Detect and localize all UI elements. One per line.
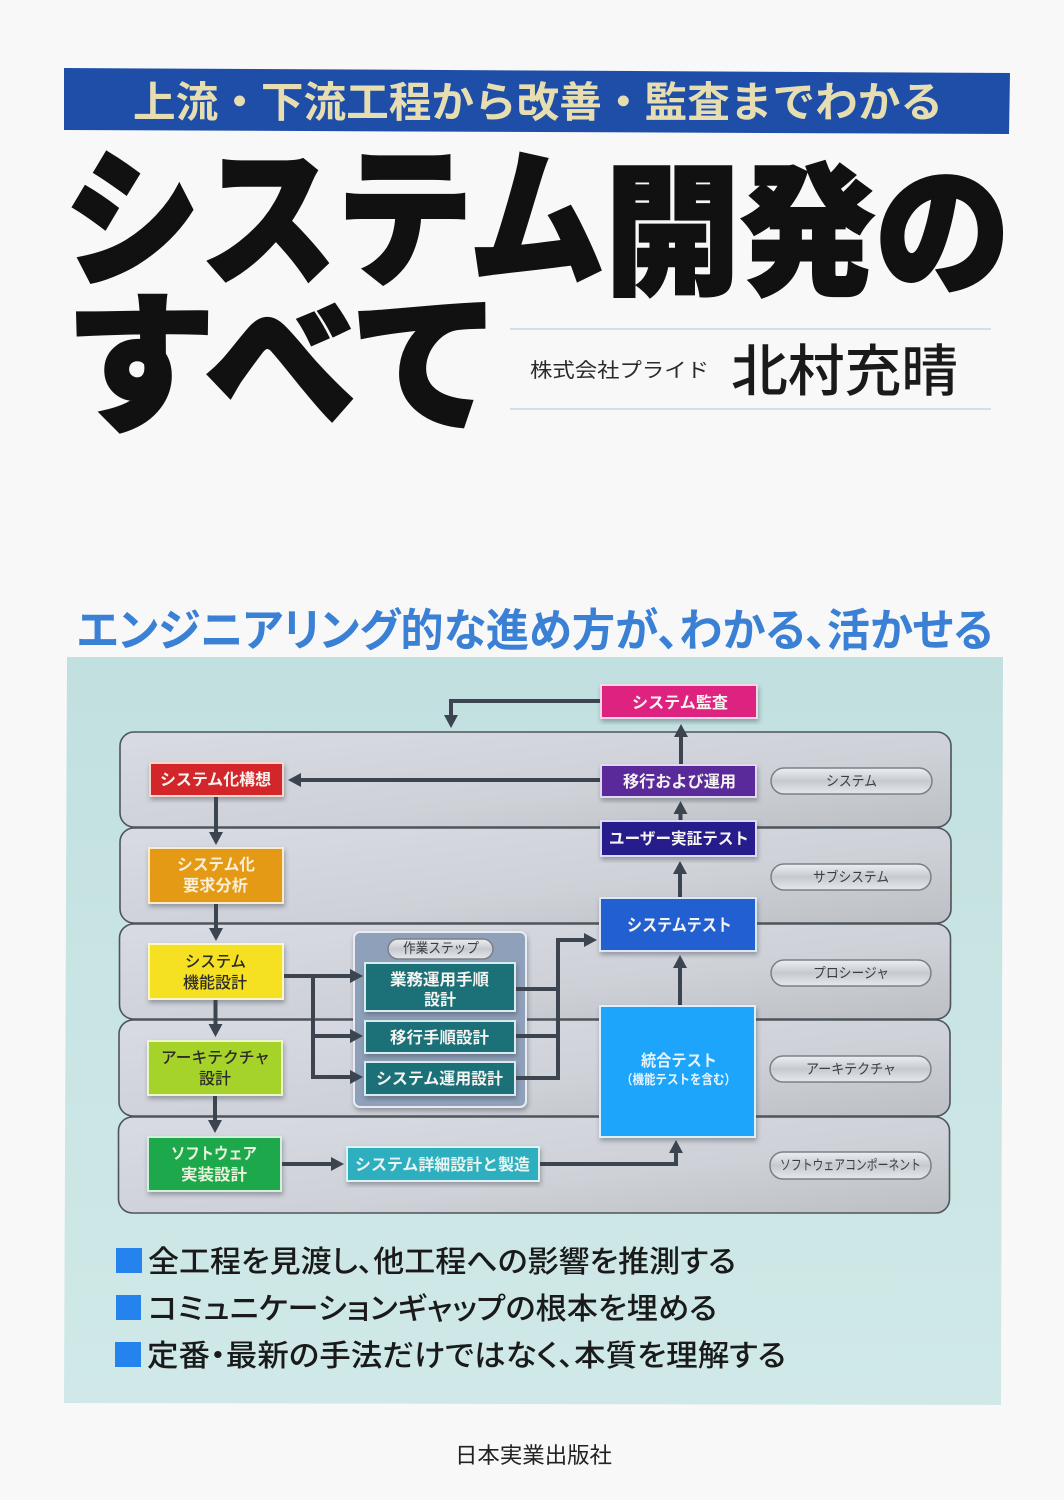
box: functional design: システム: [185, 954, 246, 971]
author block: 株式会社プライド: [530, 359, 709, 382]
box: architecture design: [148, 1041, 282, 1095]
box: user acceptance test: ユーザー実証テスト: [609, 830, 749, 848]
bullet 3: 定番・最新の手法だけではなく、本質を理解する: [147, 1340, 786, 1373]
box: software implementation design: [148, 1137, 281, 1191]
box: system audit: システム監査: [632, 694, 728, 712]
box: system operation design: システム運用設計: [376, 1070, 503, 1088]
box: system concept: システム化構想: [160, 770, 271, 789]
box: integration test: [600, 1006, 755, 1137]
box: detail design and manufacture: [347, 1147, 539, 1181]
author block: [510, 329, 991, 409]
pill: subsystem: サブシステム: [813, 869, 889, 885]
pill: software component: ソフトウェアコンポーネント: [780, 1157, 921, 1173]
box: software implementation design: 実装設計: [181, 1166, 247, 1184]
main title: システム: [64, 137, 605, 305]
layer band: procedure: [120, 924, 950, 1019]
box: business procedure design: 設計: [424, 991, 456, 1009]
pill: software component: [770, 1152, 931, 1179]
blue tagline banner: 上流・下流工程から改善・監査までわかる: [133, 79, 943, 126]
box: business procedure design: 業務運用手順: [390, 970, 489, 989]
box: user acceptance test: [601, 821, 756, 856]
box: business procedure design: [365, 963, 515, 1011]
box: architecture design: 設計: [199, 1070, 231, 1088]
layer band: system: [120, 732, 951, 827]
main title: [64, 137, 1010, 452]
author block: 北村充晴: [731, 340, 958, 403]
box: migration procedure design: 移行手順設計: [390, 1028, 489, 1047]
box: detail design and manufacture: システム詳細設計と製造: [355, 1155, 530, 1174]
box: system audit: [601, 685, 757, 718]
box: requirements analysis: 要求分析: [183, 876, 248, 895]
publisher: 日本実業出版社: [455, 1443, 612, 1468]
layer band: subsystem: [120, 828, 951, 923]
bullet 1: 全工程を見渡し、他工程への影響を推測する: [148, 1246, 736, 1279]
box: software implementation design: ソフトウェア: [171, 1145, 257, 1163]
box: requirements analysis: システム化: [177, 856, 255, 874]
pill: procedure: [771, 960, 931, 986]
layer band: architecture: [119, 1020, 950, 1116]
box: system operation design: [365, 1062, 515, 1095]
pill: system: [771, 768, 932, 794]
box: migration and operation: [601, 765, 756, 797]
box: requirements analysis: [149, 848, 283, 903]
main title: すべて: [65, 282, 501, 452]
box: system concept: [150, 763, 283, 796]
box: integration test: 統合テスト: [641, 1052, 717, 1070]
panel: work steps: [354, 932, 526, 1107]
connector arrows: [208, 701, 688, 1171]
box: system test: [600, 898, 756, 951]
blue tagline banner: [64, 68, 1010, 134]
box: integration test: （機能テストを含む）: [621, 1072, 736, 1087]
pill: work steps: [388, 939, 493, 959]
blue subheading: エンジニアリング的な進め方が、わかる、活かせる: [77, 605, 993, 656]
pill: architecture: [770, 1056, 931, 1082]
pill: procedure: プロシージャ: [813, 965, 889, 981]
pill: work steps: 作業ステップ: [403, 940, 479, 956]
box: migration and operation: 移行および運用: [623, 773, 736, 791]
box: functional design: 機能設計: [183, 974, 247, 992]
pill: subsystem: [771, 864, 931, 890]
main title: 開発の: [605, 155, 1010, 314]
bullet list: [115, 1246, 786, 1373]
panel: teal background: [64, 657, 1003, 1405]
bullet 2: コミュニケーションギャップの根本を埋める: [148, 1293, 717, 1326]
box: system test: システムテスト: [627, 916, 732, 935]
pill: architecture: アーキテクチャ: [806, 1061, 896, 1077]
layer band: software component: [118, 1117, 950, 1213]
pill: system: システム: [826, 773, 877, 789]
box: migration procedure design: [365, 1021, 515, 1053]
box: functional design: [149, 944, 283, 999]
diagram: system development flow: [118, 685, 951, 1213]
box: architecture design: アーキテクチャ: [161, 1049, 270, 1067]
